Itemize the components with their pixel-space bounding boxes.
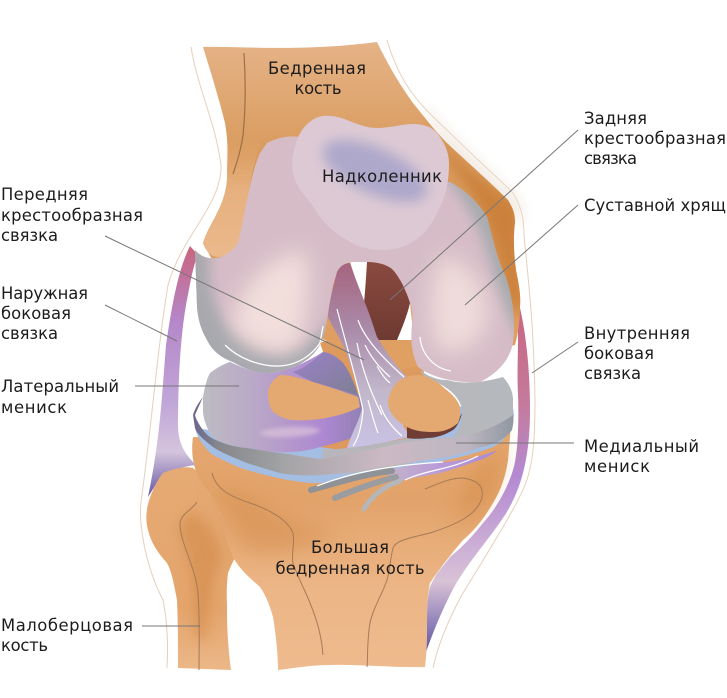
posterior cruciate ligament — [363, 262, 410, 340]
ligament: outer collateral — [148, 246, 198, 497]
label: posterior cruciate — [584, 109, 726, 168]
front band — [280, 415, 513, 475]
lateral meniscus wedge — [293, 352, 358, 395]
label: fibula — [1, 616, 133, 655]
label: posterior cruciate: связка — [584, 149, 637, 168]
blue rim underlay — [195, 400, 514, 483]
label: posterior cruciate: Задняя — [584, 109, 647, 128]
white gaps in notch — [350, 262, 414, 340]
orange centre — [320, 338, 430, 450]
lateral meniscus hole — [268, 375, 360, 420]
label: outer collateral: боковая — [1, 304, 71, 323]
label: anterior cruciate: крестообразная — [1, 206, 143, 225]
label: outer collateral: связка — [1, 324, 58, 343]
ligament: inner collateral — [426, 300, 530, 652]
cartilage — [195, 136, 514, 382]
tibial eminence — [388, 375, 460, 432]
fan grey strands — [311, 471, 400, 509]
label: inner collateral — [584, 324, 690, 383]
patella shading — [314, 127, 436, 215]
medial pink highlight — [430, 255, 488, 353]
label: cartilage: Суставной хрящ — [584, 196, 726, 215]
fibula vein — [180, 502, 199, 670]
lateral grey edge — [195, 250, 327, 373]
label: femur: Бедренная — [268, 59, 366, 78]
label: anterior cruciate: Передняя — [1, 185, 88, 204]
pointer lines — [105, 130, 578, 626]
label: tibia: Большая — [311, 538, 389, 557]
label: fibula: кость — [1, 636, 48, 655]
femur shading — [445, 146, 520, 318]
label: tibia: бедренная кость — [276, 559, 424, 578]
fibula — [146, 467, 235, 670]
soft shadow near femur — [420, 100, 525, 225]
fibula shade — [178, 510, 222, 640]
label: posterior cruciate: крестообразная — [584, 129, 726, 148]
tibial fan ligament — [385, 450, 497, 482]
label: anterior cruciate — [1, 185, 143, 245]
label: medial meniscus — [584, 437, 699, 476]
tibia shading — [215, 440, 505, 552]
lateral meniscus — [203, 352, 366, 452]
medial grey edge — [447, 182, 514, 336]
lateral pink highlight — [232, 250, 308, 351]
label: outer collateral — [1, 284, 88, 343]
label: lateral meniscus: мениск — [1, 398, 67, 417]
fan white strands — [317, 456, 478, 486]
label: outer collateral: Наружная — [1, 284, 88, 303]
cartilage white arcs — [225, 326, 451, 371]
label: inner collateral: Внутренняя — [584, 324, 690, 343]
femur bone — [203, 42, 520, 370]
femur lower tip — [203, 140, 262, 257]
label: patella: Надколенник — [322, 167, 442, 186]
label: inner collateral: связка — [584, 364, 641, 383]
medial meniscus — [322, 370, 513, 474]
rim: grey side wall — [193, 397, 513, 475]
label: medial meniscus: Медиальный — [584, 437, 699, 456]
anterior cruciate ligament — [328, 263, 410, 448]
cruciate white strands — [337, 309, 404, 446]
label: medial meniscus: мениск — [584, 457, 650, 476]
label: inner collateral: боковая — [584, 344, 654, 363]
label: femur second line: кость — [294, 79, 342, 98]
label: fibula: Малоберцовая — [1, 616, 133, 635]
label: lateral meniscus — [1, 377, 119, 417]
label: anterior cruciate: связка — [1, 226, 58, 245]
label: tibia — [276, 538, 424, 578]
eminence shadow — [407, 413, 462, 439]
skin outline — [141, 40, 535, 668]
femur vein — [233, 53, 245, 174]
label: lateral meniscus: Латеральный — [1, 377, 119, 396]
tibia — [192, 425, 511, 670]
tibia veins — [212, 473, 482, 667]
lateral meniscus highlight — [260, 425, 320, 439]
patella — [292, 116, 449, 250]
